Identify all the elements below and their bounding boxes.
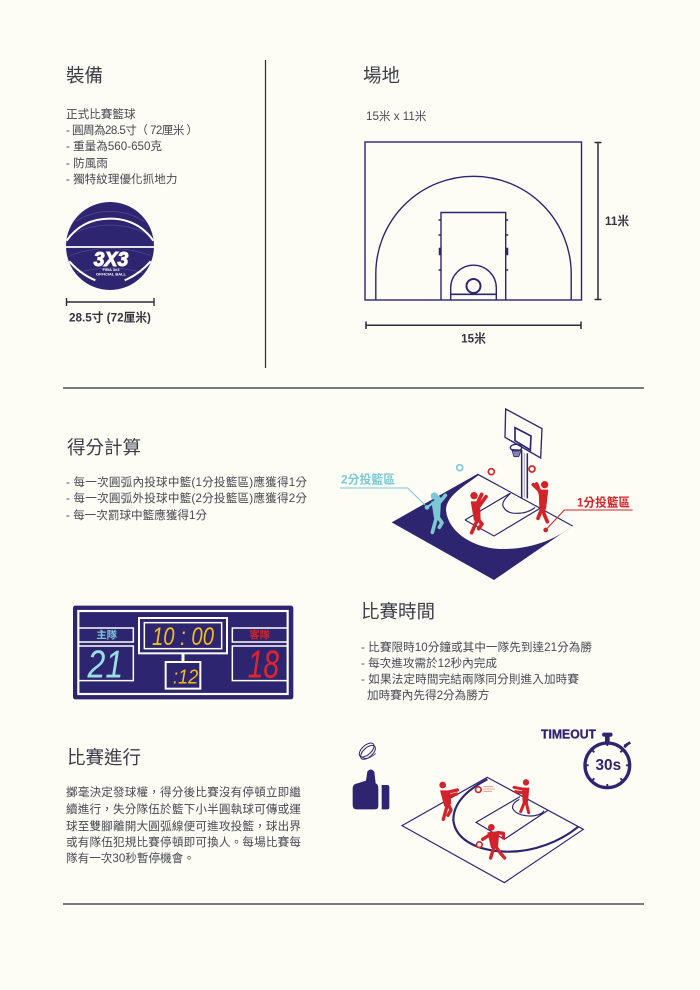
label: 2-point zone: 2分投籃區	[341, 472, 395, 486]
heading: game flow: 比賽進行	[67, 747, 141, 768]
icon: basketball	[66, 202, 154, 290]
callout line: 2-point	[340, 488, 425, 505]
text: game flow rules: 隊有一次30秒暫停機會。	[66, 851, 195, 865]
stopwatch value: 30s	[596, 757, 621, 774]
heading: equipment: 裝備	[66, 65, 103, 86]
key	[476, 797, 548, 839]
two-point zone	[392, 474, 573, 580]
diagram: game flow court	[402, 777, 583, 883]
away score: 18	[248, 643, 279, 687]
diagram: half court	[365, 142, 582, 300]
text: equipment details	[66, 107, 198, 186]
text: game time rules: - 如果法定時間完結兩隊同分則進入加時賽	[361, 672, 579, 686]
text: game flow rules: 擲毫決定發球權，得分後比賽沒有停頓立即繼	[66, 785, 301, 799]
player: receiver	[514, 779, 529, 813]
text: game flow rules: 球至雙腳離開大圓弧線便可進攻投籃，球出界	[66, 819, 301, 833]
player: dribbler	[476, 824, 505, 858]
court outline	[402, 777, 583, 883]
player: red shooter left	[470, 492, 486, 533]
icon: stopwatch	[585, 733, 630, 788]
text: game flow rules	[66, 785, 301, 865]
three-point arc	[453, 779, 578, 852]
player: passer	[439, 782, 457, 819]
ball logo: 3X3	[94, 248, 129, 271]
key lines	[465, 474, 573, 536]
heading: game time: 比賽時間	[361, 601, 435, 622]
text: equipment details: - 防風雨	[66, 156, 108, 170]
home label: 主隊	[96, 629, 118, 642]
text: equipment details: - 獨特紋理優化抓地力	[66, 172, 177, 186]
dimension: ball diameter	[66, 298, 154, 306]
text: scoring rules: - 每一次圓弧內投球中籃(1分投籃區)應獲得1分	[66, 475, 307, 489]
scoreboard	[73, 606, 293, 699]
ball caption: FIBA 3x3	[103, 267, 120, 272]
hoop stand	[505, 409, 542, 498]
label: 15 m: 15米	[461, 332, 486, 346]
heading: court: 場地	[363, 65, 400, 86]
text: game time rules: - 每次進攻需於12秒內完成	[361, 656, 497, 670]
text: scoring rules	[66, 475, 307, 522]
game clock: 10 : 00	[152, 623, 214, 651]
text: equipment details: - 圓周為28.5寸（ 72厘米 ）	[66, 123, 198, 137]
thumbs up	[353, 769, 389, 809]
player: blue shooter	[425, 492, 445, 532]
text: equipment details: 正式比賽籃球	[66, 107, 136, 121]
dimension: court depth	[594, 142, 602, 300]
ball: pass	[475, 787, 495, 792]
label: 11 m: 11米	[605, 214, 629, 228]
text: game time rules: - 比賽限時10分鐘或其中一隊先到達21分為勝	[361, 640, 592, 654]
home score: 21	[87, 643, 123, 687]
text: scoring rules: - 每一次罰球中籃應獲得1分	[66, 508, 207, 522]
text: game flow rules: 續進行，失分隊伍於籃下小半圓執球可傳或運	[66, 802, 301, 816]
away label: 客隊	[249, 629, 271, 642]
icon: flipped coin and thumbs up	[353, 741, 389, 809]
ball caption line 2: OFFICIAL BALL	[96, 271, 127, 276]
heading: scoring: 得分計算	[67, 437, 141, 458]
callout line: 1-point	[543, 510, 633, 532]
diagram: isometric scoring court	[340, 409, 633, 580]
shot clock: :12	[173, 666, 198, 688]
text: scoring rules: - 每一次圓弧外投球中籃(2分投籃區)應獲得2分	[66, 491, 307, 505]
rings	[457, 465, 463, 471]
text: court size: 15米 x 11米	[366, 110, 427, 123]
dimension: court width	[366, 322, 581, 329]
text: game time rules: 加時賽內先得2分為勝方	[367, 688, 489, 702]
label: 1-point zone: 1分投籃區	[577, 494, 630, 510]
flipped coin	[357, 741, 378, 762]
text: game flow rules: 或有隊伍犯規比賽停頓即可換人。每場比賽每	[66, 835, 301, 849]
player: red shooter right	[533, 481, 548, 522]
label: timeout: TIMEOUT	[541, 728, 596, 742]
label: ball size: 28.5寸 (72厘米)	[69, 310, 151, 324]
text: equipment details: - 重量為560-650克	[66, 139, 162, 153]
one-point zone	[446, 475, 573, 549]
text: game time rules	[361, 640, 592, 702]
